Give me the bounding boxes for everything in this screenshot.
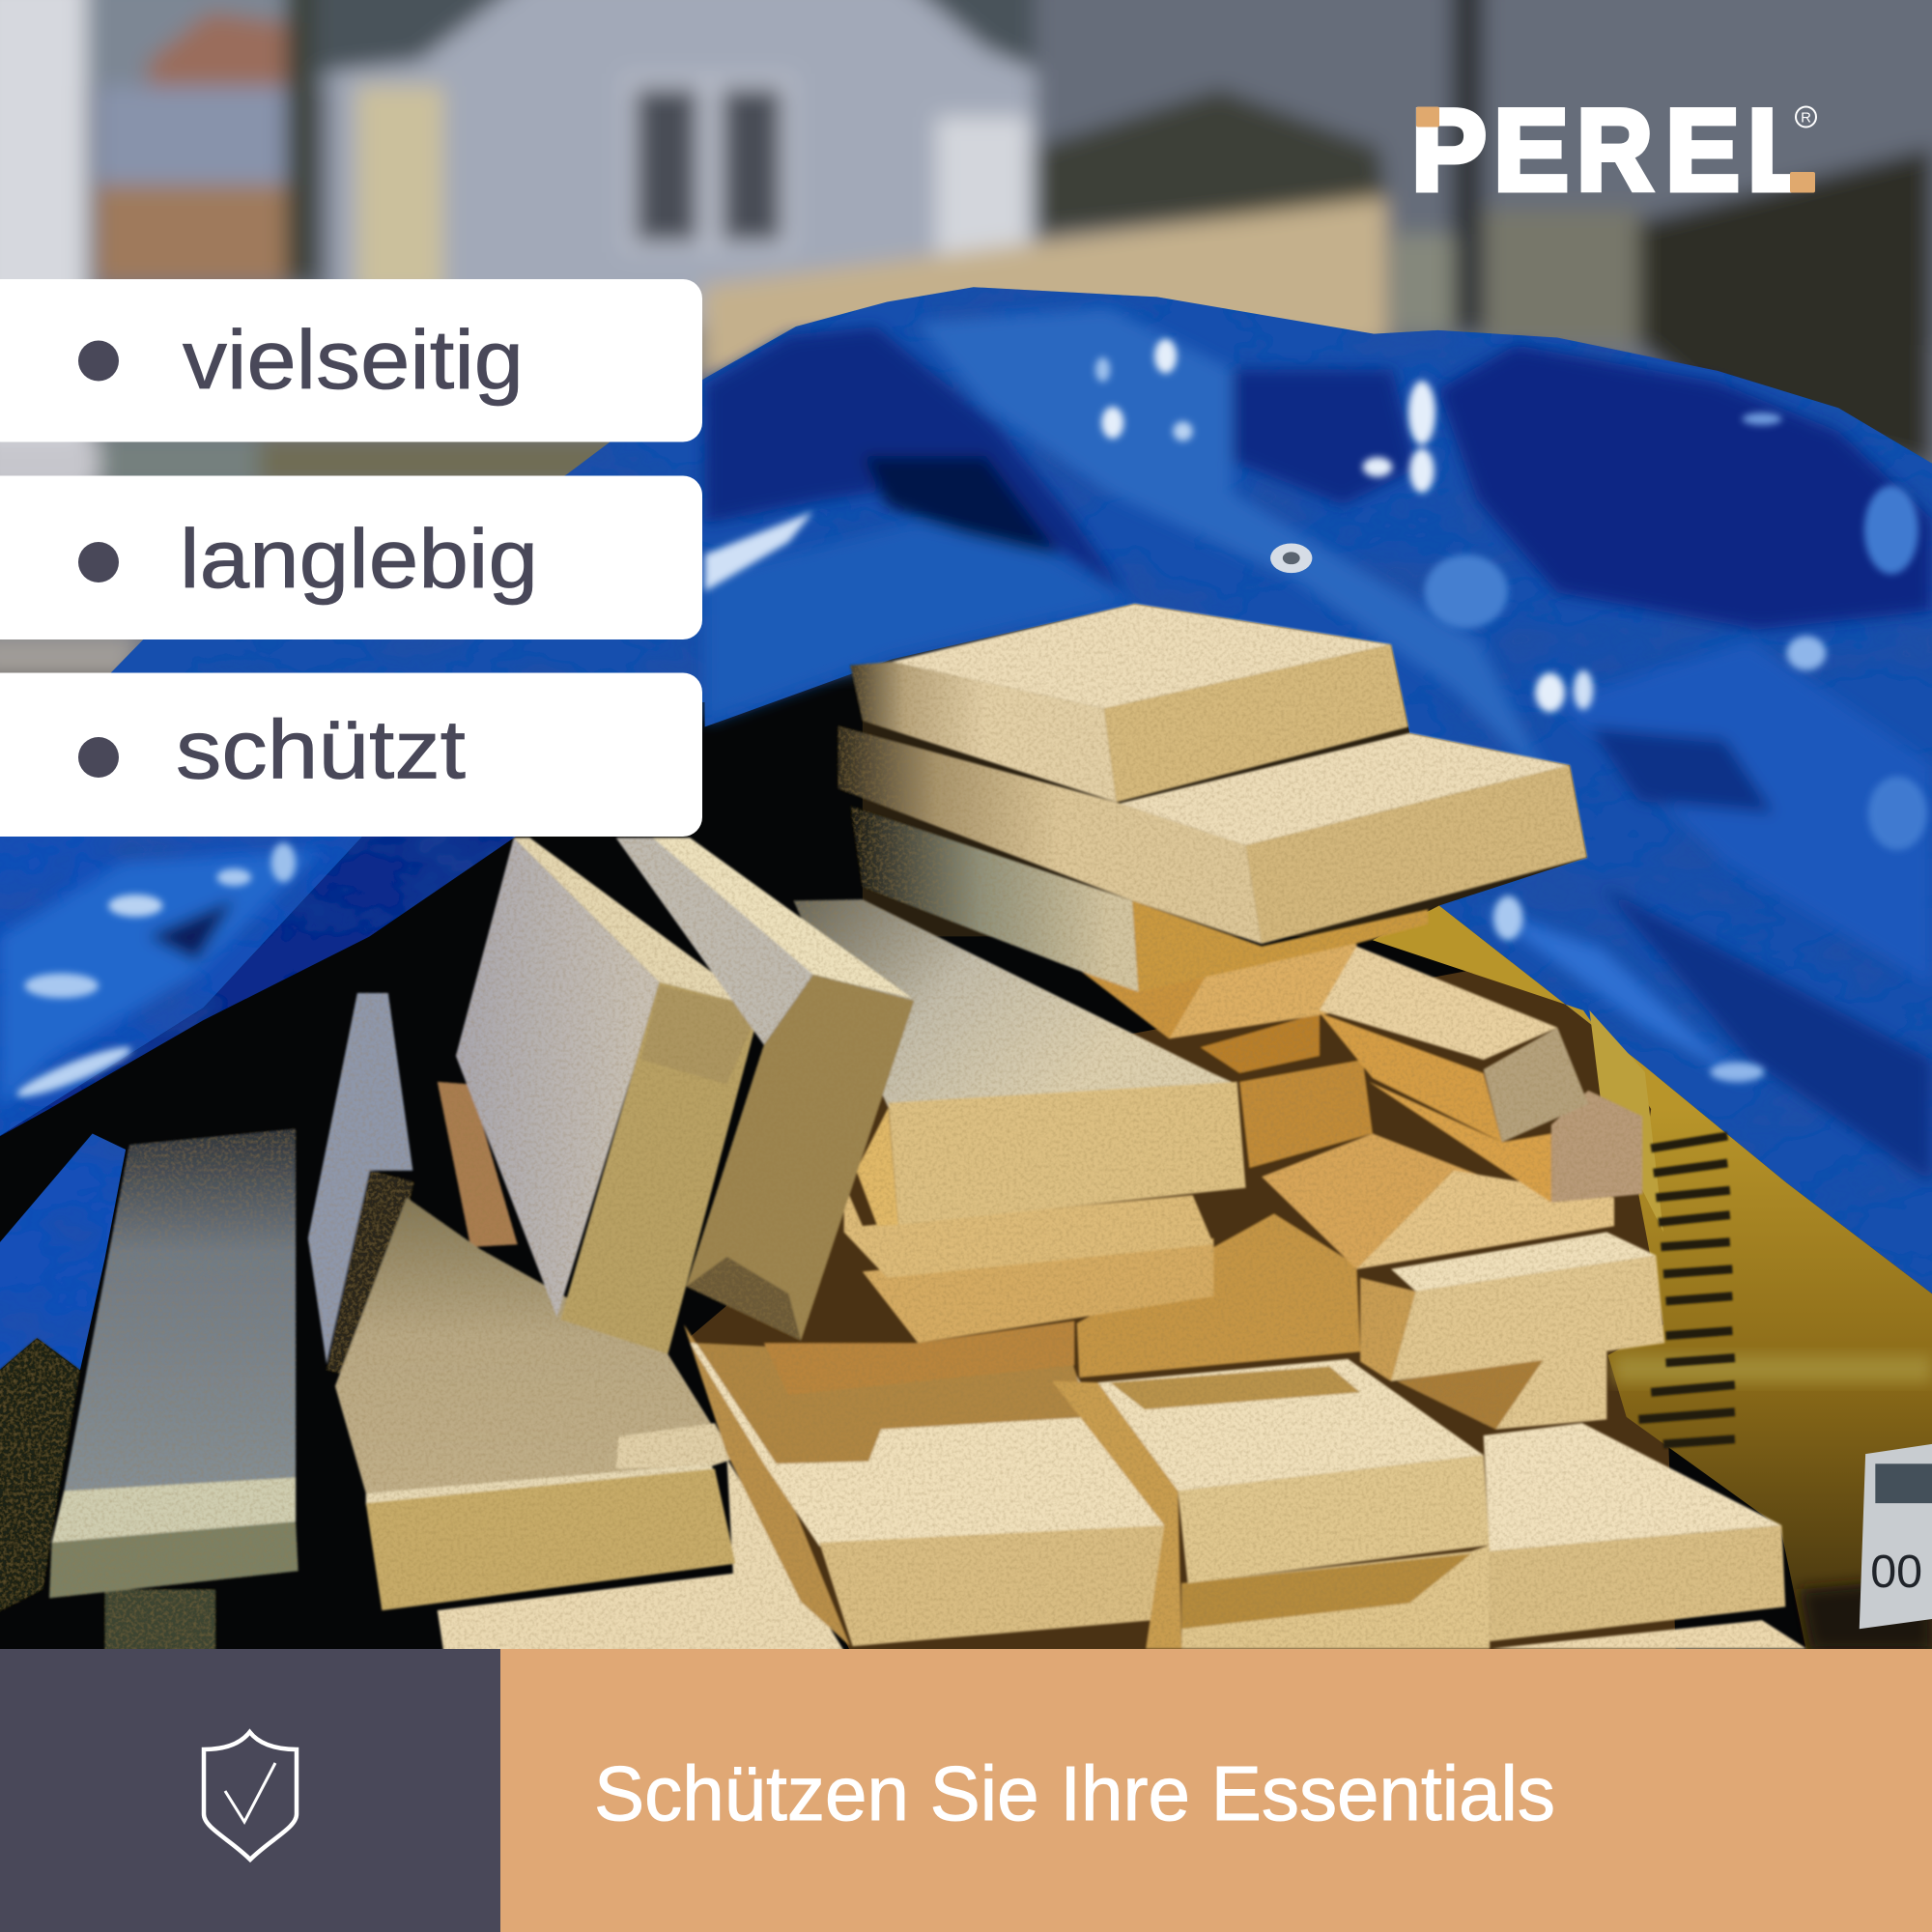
- timber: all planks: [0, 604, 1806, 1651]
- plank: small brown offcut: [438, 1082, 518, 1247]
- registered mark: R: [1801, 110, 1811, 126]
- logo: PEREL: E: [1493, 85, 1569, 214]
- label: schützt: [176, 703, 466, 796]
- plank: right cluster: [1079, 944, 1642, 1203]
- plank: lower right stack: [1077, 1133, 1664, 1430]
- shadow fill between stacked boards: [690, 936, 1676, 1651]
- logo: PEREL: E: [1665, 85, 1740, 214]
- barcode label: [1860, 1444, 1932, 1629]
- logo: PEREL: L: [1747, 85, 1812, 214]
- registered mark: [1796, 106, 1816, 128]
- plank: grey left board: [0, 1128, 298, 1651]
- plank: leaning pale board: [456, 838, 760, 1354]
- logo: PEREL: [1411, 85, 1816, 214]
- tarp eyelet: [1270, 543, 1312, 573]
- label: vielseitig: [183, 314, 524, 407]
- right-hand yellow wrapped crate: [1373, 905, 1932, 1651]
- plank: bottom middle: [1052, 1359, 1490, 1649]
- plank: bottom centre: [684, 1324, 1166, 1646]
- tarp: main blue sheet: [0, 287, 1932, 1375]
- tarp: folds and highlights: [0, 308, 1932, 1182]
- icon: shield with check: [204, 1732, 297, 1860]
- plank: dark upright post: [308, 993, 414, 1380]
- label: langlebig: [180, 513, 538, 606]
- tagline text: Schützen Sie Ihre Essentials: [594, 1750, 1555, 1836]
- plank: central stack low boards: [764, 1182, 1213, 1395]
- card: schützt: [0, 672, 702, 837]
- dark void behind timber: [0, 690, 1932, 1651]
- card: langlebig: [0, 475, 702, 639]
- plank: upper stack: [838, 604, 1587, 992]
- bullet: [78, 340, 119, 381]
- logo: PEREL: P: [1411, 85, 1487, 214]
- plank: large bottom-left: [335, 1198, 735, 1610]
- plank: centre wide board: [793, 899, 1246, 1226]
- barcode label: 00: [1870, 1546, 1922, 1598]
- card: vielseitig: [0, 279, 702, 442]
- logo accent square top: [1416, 106, 1439, 128]
- footer panel: tagline: [500, 1649, 1932, 1932]
- logo accent square bottom: [1790, 172, 1815, 193]
- blurred background: house and fence: [0, 0, 1932, 684]
- bullet: [78, 542, 119, 582]
- footer panel: dark icon block: [0, 1649, 500, 1932]
- logo: PEREL: R: [1577, 85, 1653, 214]
- plank: bottom right: [1484, 1423, 1806, 1649]
- plank: leaning dark-ended board: [616, 838, 914, 1341]
- plank: long pale under-board: [438, 1459, 844, 1651]
- crate stripes: [1638, 1136, 1735, 1444]
- bullet: [78, 737, 119, 778]
